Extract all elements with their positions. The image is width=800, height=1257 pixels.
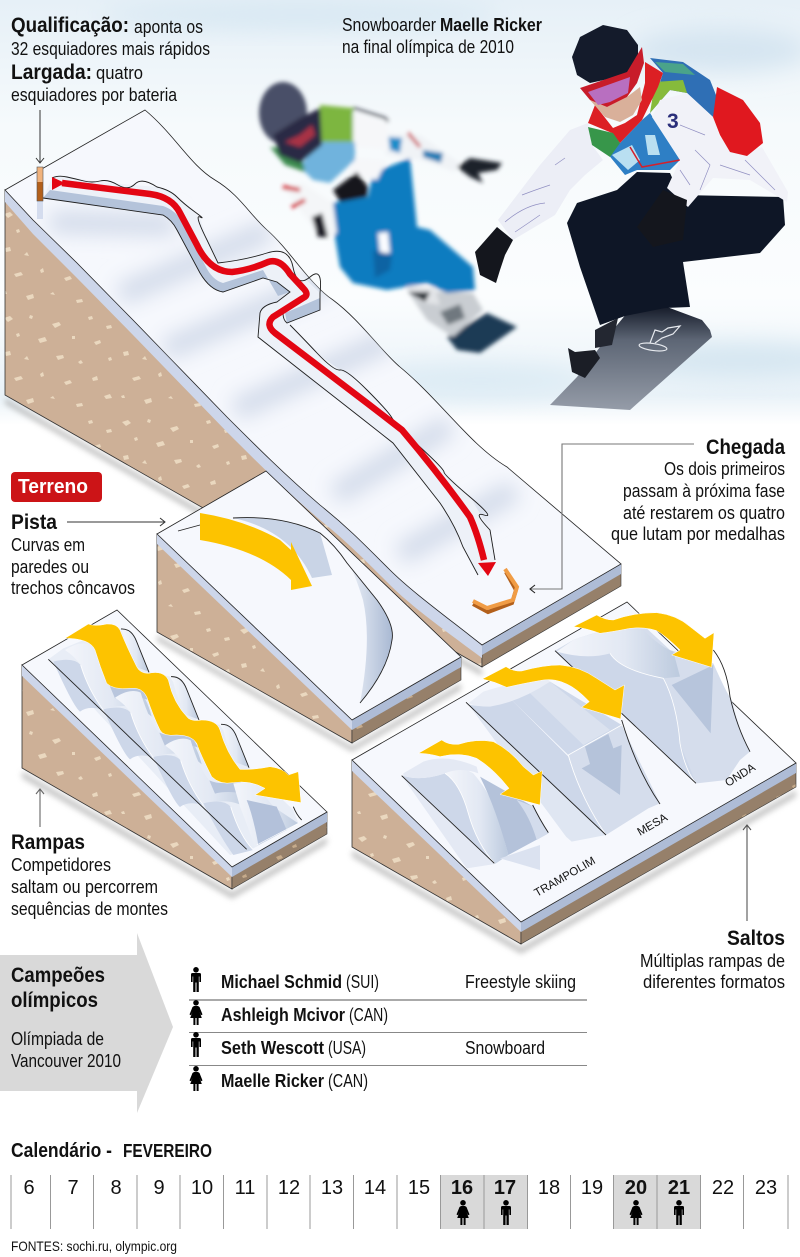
text: qualificação e largada: esquiadores por bateria xyxy=(11,85,178,105)
bib upper xyxy=(650,58,718,117)
goggles xyxy=(580,47,644,107)
text: caption Maelle Ricker: na final olímpica de 2010 xyxy=(342,37,514,57)
calendar: 9 xyxy=(153,1177,165,1199)
left sleeve xyxy=(498,123,603,240)
calendar: 13 xyxy=(321,1177,343,1199)
text: rampas: Competidores xyxy=(11,855,111,875)
sport: freestyle: Freestyle skiing xyxy=(465,972,576,992)
shadow xyxy=(5,398,482,676)
white jacket xyxy=(652,93,788,207)
calendar: 21 xyxy=(668,1177,690,1199)
board xyxy=(550,307,712,410)
finish gate xyxy=(473,569,517,612)
helmet xyxy=(572,25,638,83)
calendar: 23 xyxy=(755,1177,777,1199)
champion 4: Maelle Ricker xyxy=(221,1071,324,1091)
saltos block xyxy=(352,602,796,954)
heading: calendário: Calendário - xyxy=(11,1140,112,1162)
calendar: 12 xyxy=(278,1177,300,1199)
text: chegada: Chegada xyxy=(706,436,785,459)
binding xyxy=(407,290,483,337)
yellow arrow: trampolim xyxy=(418,740,542,805)
champion 3: Seth Wescott xyxy=(221,1038,324,1058)
text: chegada xyxy=(611,436,785,544)
icon: male day 17 xyxy=(501,1200,511,1225)
track outlines xyxy=(43,176,495,575)
icon: male 2 xyxy=(191,1032,201,1057)
text: qualificação e largada: 32 esquiadores mais rápidos xyxy=(11,39,210,59)
text: pista: trechos côncavos xyxy=(11,578,135,598)
panel: campeões olímpicos arrow: Olímpiada de xyxy=(11,1029,104,1049)
collar xyxy=(588,62,663,143)
icon: female xyxy=(190,1000,202,1025)
champion 1: (SUI) xyxy=(346,972,379,992)
yellow arrow xyxy=(200,513,312,590)
calendar: 14 xyxy=(364,1177,386,1199)
sport: snowboard: Snowboard xyxy=(465,1038,545,1058)
calendar: 6 xyxy=(23,1177,35,1199)
gloves xyxy=(475,227,513,283)
photo background: snow xyxy=(0,0,800,425)
snow top xyxy=(5,110,621,645)
arrow to start xyxy=(36,110,44,163)
arrow: pista xyxy=(67,518,165,526)
terreno badge: Terreno xyxy=(18,476,88,498)
left arm xyxy=(283,183,337,237)
main course block xyxy=(5,110,621,676)
calendar: 8 xyxy=(110,1177,122,1199)
shadow xyxy=(157,635,461,752)
red route xyxy=(62,183,484,560)
snow undulations xyxy=(50,222,515,555)
arrow: rampas xyxy=(36,789,44,827)
saltos block: MESA xyxy=(636,812,670,839)
text: rampas: saltam ou percorrem xyxy=(11,877,158,897)
start gate xyxy=(37,167,43,219)
yellow arrow: mesa xyxy=(482,665,624,719)
torso xyxy=(353,112,390,150)
panel: campeões olímpicos arrow xyxy=(0,933,173,1113)
track channel xyxy=(43,176,495,575)
text: pista xyxy=(11,511,135,598)
calendar: 7 xyxy=(67,1177,79,1199)
panel: campeões olímpicos arrow: Vancouver 2010 xyxy=(11,1051,121,1071)
saltos block: ONDA xyxy=(723,762,758,790)
terreno badge xyxy=(11,472,102,502)
champion 1: Michael Schmid xyxy=(221,972,342,992)
calendar: 19 xyxy=(581,1177,603,1199)
text: pista: paredes ou xyxy=(11,557,89,577)
bowl wall xyxy=(233,518,332,578)
text: qualificação e largada: Qualificação: xyxy=(11,14,129,37)
calendar: 10 xyxy=(191,1177,213,1199)
calendar: 16 xyxy=(451,1177,473,1199)
panel: campeões olímpicos arrow: Campeões xyxy=(11,964,105,987)
text: saltos: diferentes formatos xyxy=(643,972,785,992)
text: qualificação e largada: aponta os xyxy=(134,17,203,37)
finish arrowhead xyxy=(478,562,496,576)
front side xyxy=(482,564,621,667)
trampolim jump xyxy=(402,758,548,870)
text: caption Maelle Ricker: Maelle Ricker xyxy=(440,15,542,35)
snow edge xyxy=(5,190,482,658)
icon: female day 16 xyxy=(456,1200,470,1225)
heading: calendário xyxy=(11,1140,212,1162)
rampas block xyxy=(22,610,327,899)
icon: male day 21 xyxy=(674,1200,684,1225)
list: champions xyxy=(189,967,587,1091)
photo: snowboarder Maelle Ricker xyxy=(475,25,788,410)
text: chegada: Os dois primeiros xyxy=(664,459,785,479)
right arm xyxy=(385,133,460,172)
text: chegada: até restarem os quatro xyxy=(623,503,785,523)
soil side xyxy=(5,190,482,667)
bumps xyxy=(48,624,302,855)
onda jump xyxy=(555,628,750,783)
number: 3 xyxy=(667,110,679,133)
text: saltos: Múltiplas rampas de xyxy=(640,951,785,971)
panel: campeões olímpicos arrow: olímpicos xyxy=(11,989,98,1012)
calendar: 18 xyxy=(538,1177,560,1199)
binding and boot xyxy=(568,348,600,378)
track walls xyxy=(43,190,290,296)
champion 2: Ashleigh Mcivor xyxy=(221,1005,345,1025)
text: caption Maelle Ricker: Snowboarder xyxy=(342,15,436,35)
champion 3: (USA) xyxy=(328,1038,366,1058)
calendar: 11 xyxy=(235,1177,255,1199)
bib chest xyxy=(603,113,680,175)
arrow: saltos xyxy=(743,825,751,921)
calendar: 22 xyxy=(712,1177,734,1199)
text: chegada: que lutam por medalhas xyxy=(611,524,785,544)
calendar: 15 xyxy=(408,1177,430,1199)
red back xyxy=(713,87,763,156)
labels: TRAMPOLIM xyxy=(532,855,598,900)
calendar: 20 xyxy=(625,1177,647,1199)
shadow xyxy=(352,790,796,954)
text: saltos xyxy=(640,927,785,992)
text: rampas: Rampas xyxy=(11,831,85,854)
text: qualificação e largada xyxy=(11,14,210,105)
icon: female day 20 xyxy=(630,1200,642,1225)
heading: calendário: FEVEREIRO xyxy=(123,1141,212,1161)
calendar: 17 xyxy=(494,1177,516,1199)
glove xyxy=(457,158,502,183)
pants xyxy=(567,172,785,325)
text: pista: Curvas em xyxy=(11,535,85,555)
calendar xyxy=(11,1175,788,1229)
face xyxy=(590,87,642,122)
champion 2: (CAN) xyxy=(349,1005,388,1025)
text: caption Maelle Ricker xyxy=(342,15,542,57)
text: rampas xyxy=(11,831,168,919)
yellow arrow: onda xyxy=(573,613,714,667)
pants xyxy=(332,158,475,293)
helmet xyxy=(259,82,307,144)
text: qualificação e largada: Largada: xyxy=(11,61,92,84)
pista block xyxy=(157,471,461,752)
start triangle xyxy=(52,177,65,190)
text: saltos: Saltos xyxy=(727,927,785,950)
sources: FONTES: sochi.ru, olympic.org xyxy=(11,1238,177,1254)
shadow xyxy=(22,771,327,899)
text: pista: Pista xyxy=(11,511,57,534)
photo: blurred snowboarder in blue xyxy=(259,82,517,353)
yellow arrow xyxy=(65,624,301,803)
mesa jump xyxy=(466,678,660,842)
text: qualificação e largada: quatro xyxy=(96,63,143,83)
text: rampas: sequências de montes xyxy=(11,899,168,919)
board xyxy=(447,313,517,353)
board logo xyxy=(639,326,680,352)
arrow: chegada xyxy=(530,444,694,593)
icon: female 2 xyxy=(190,1066,202,1091)
icon: male xyxy=(191,967,201,992)
champion 4: (CAN) xyxy=(328,1071,368,1091)
